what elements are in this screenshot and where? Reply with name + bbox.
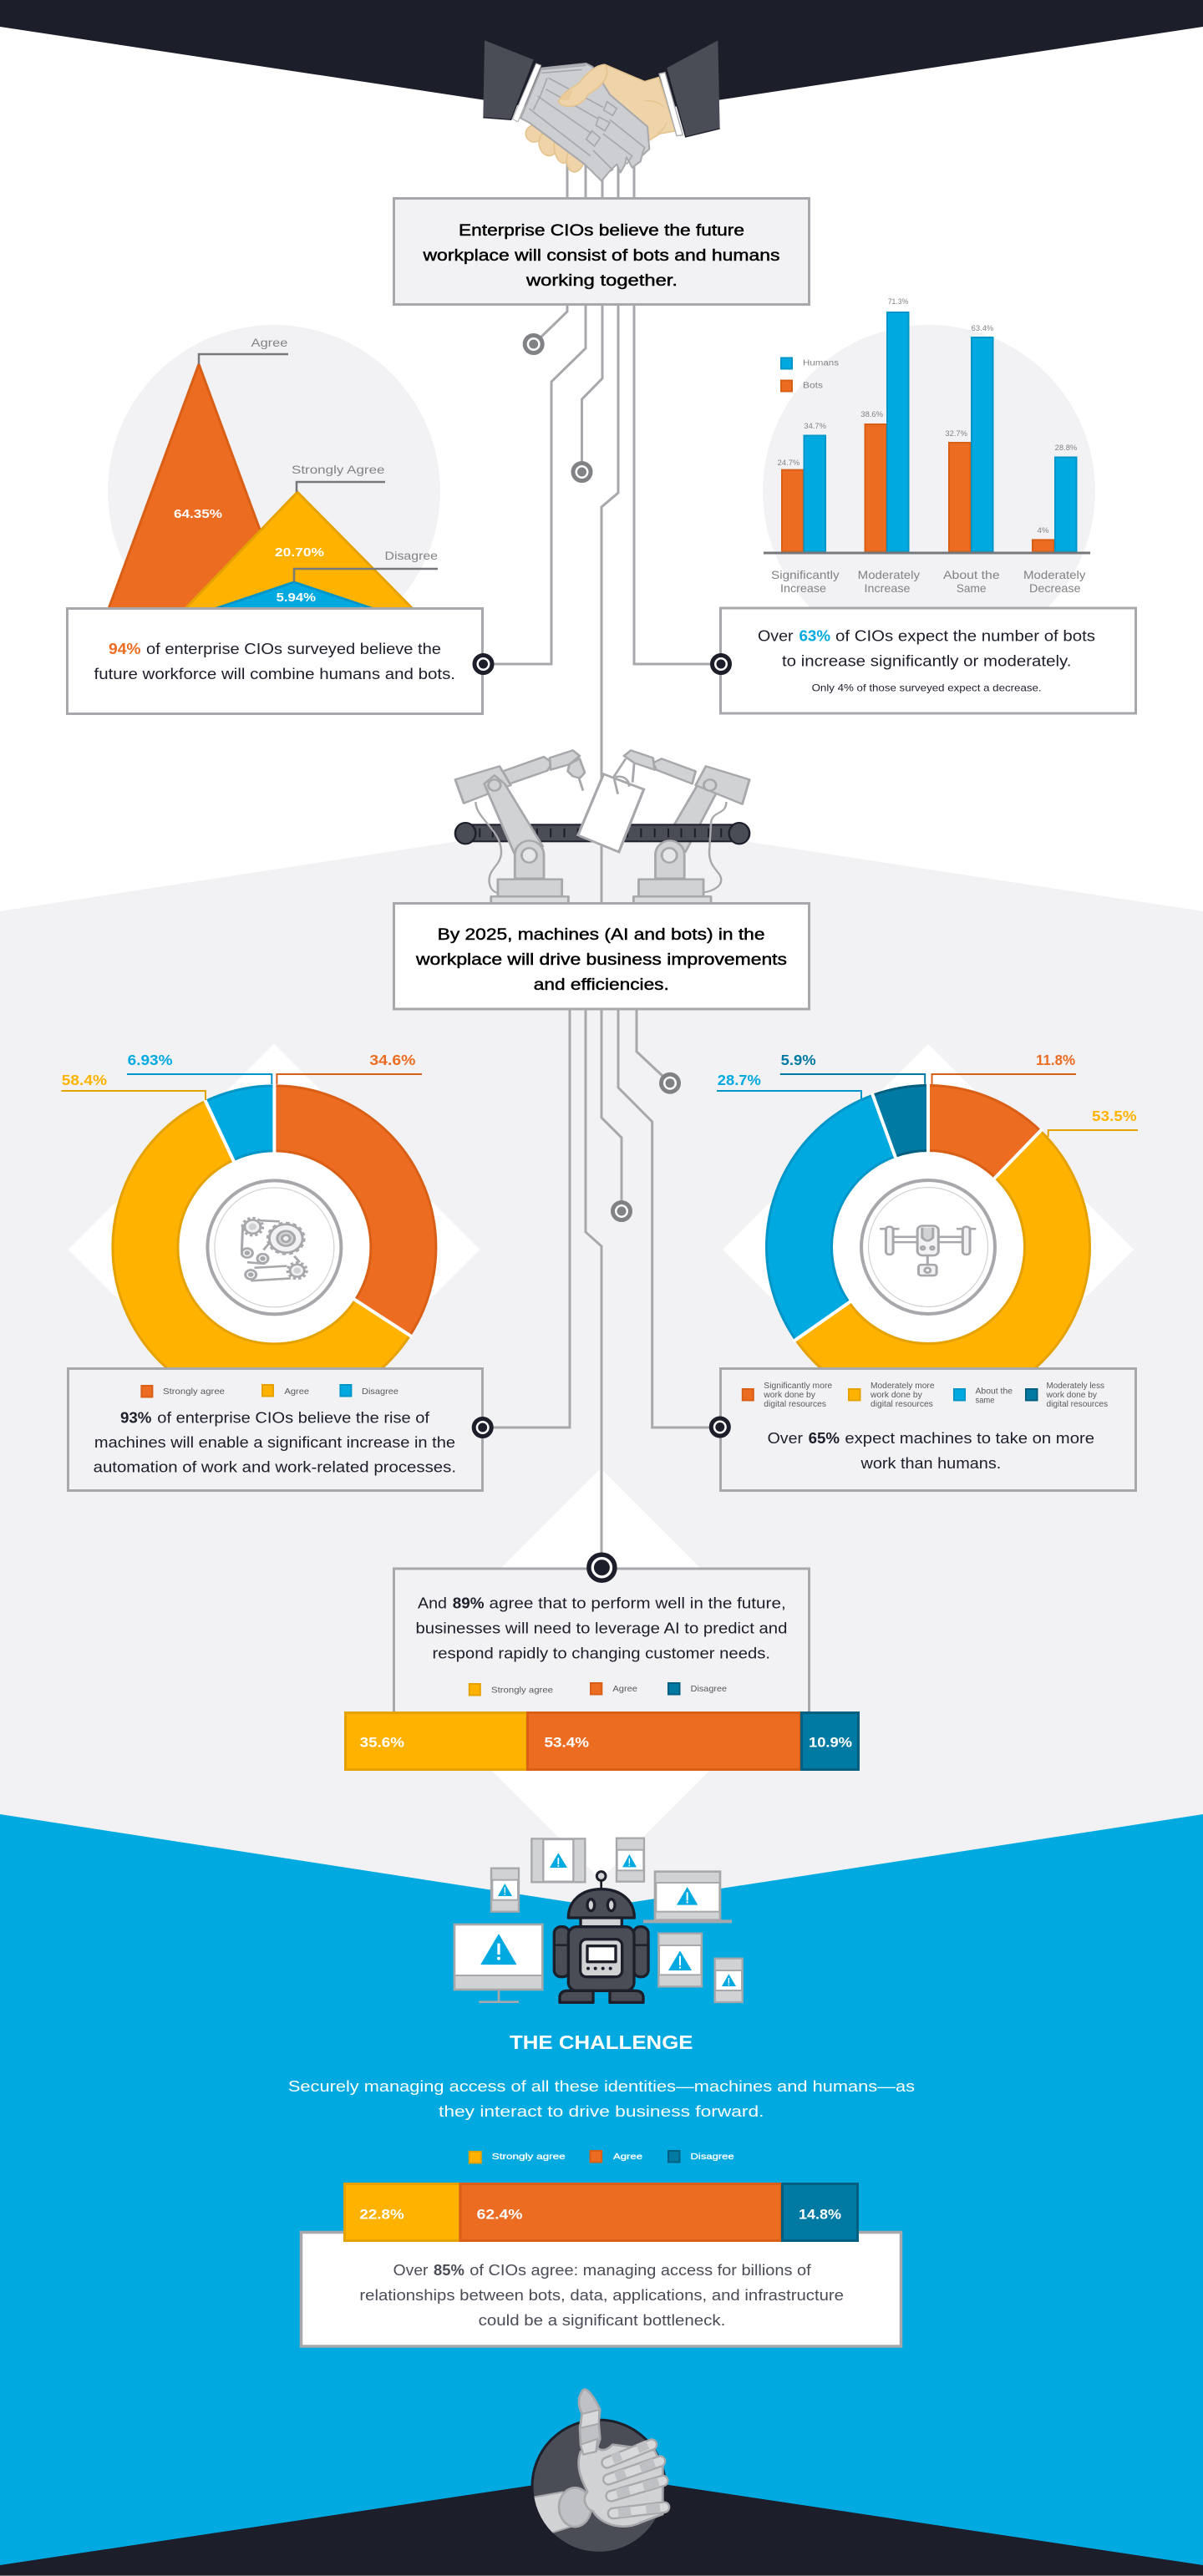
panel: 65% callout: 65% — [809, 1430, 840, 1447]
device: phone top — [617, 1838, 644, 1882]
bars: moderately increase — [865, 312, 909, 552]
chart: work share donut — [717, 1052, 1138, 1377]
legend: moderately less: digital resources — [1046, 1400, 1108, 1409]
bar values: 34.7% — [804, 422, 826, 430]
panel: 93% callout: machines will enable a significant increase in the — [94, 1434, 455, 1451]
center rings — [861, 1180, 995, 1314]
conveyor belt — [455, 823, 749, 844]
paper sheet — [578, 774, 644, 852]
category labels: Increase — [780, 581, 826, 595]
value: 64.35%: 64.35% — [174, 507, 222, 521]
segment: agree — [460, 2183, 781, 2240]
legend: about the same: same — [976, 1397, 995, 1405]
panel: 93% callout: 93% — [120, 1410, 151, 1427]
node: middle wire center — [613, 1203, 630, 1220]
segment: moderately less — [799, 1118, 1058, 1377]
legend: agree: Agree — [284, 1387, 309, 1397]
triangle: agree — [104, 364, 294, 622]
segment: strongly agree — [145, 1118, 404, 1377]
legend: agree — [591, 1683, 637, 1694]
panel: 89% callout: businesses will need to leverage AI to predict and — [416, 1620, 787, 1637]
chart: bots versus humans bars — [764, 297, 1090, 595]
value: 5.94%: 5.94% — [277, 591, 316, 605]
legend: significantly more: work done by — [763, 1391, 815, 1400]
panel: 65% callout: Over — [768, 1430, 803, 1447]
right sleeve — [667, 40, 720, 137]
legend: challenge bar — [470, 2151, 734, 2163]
legend: moderately more: digital resources — [871, 1400, 933, 1409]
segment: agree: 53.4% — [545, 1736, 589, 1751]
bars: about the same — [949, 337, 992, 552]
panel: 89% callout: agree that to perform well in the future, — [490, 1595, 786, 1612]
panel: 94% callout: 94% — [109, 641, 140, 657]
node: wire end top left — [525, 336, 542, 352]
triangle: strongly agree — [172, 492, 426, 622]
device: laptop — [643, 1872, 732, 1921]
right arm behind conveyor — [662, 775, 721, 852]
panel: headline two: By 2025, machines (AI and bots) in the — [438, 926, 765, 944]
panel: 89% callout: And — [418, 1595, 447, 1612]
legend: agree — [262, 1385, 309, 1397]
legend: disagree — [340, 1385, 398, 1397]
label: 58.4% — [61, 1072, 206, 1100]
legend: moderately less: work done by — [1045, 1391, 1097, 1400]
text: challenge description — [288, 2078, 915, 2120]
legend: disagree: Disagree — [691, 1684, 727, 1694]
thumb — [579, 2390, 600, 2454]
panel: 85% callout: relationships between bots, data, applications, and infrastructure — [359, 2287, 844, 2304]
panel: headline one — [394, 199, 809, 304]
human thumb — [558, 64, 607, 106]
node: 65% callout connector — [711, 1418, 728, 1436]
segment: disagree — [782, 2183, 857, 2240]
node: 94% callout connector — [475, 655, 492, 673]
legend: strongly agree — [141, 1386, 225, 1397]
legend: humans — [781, 357, 839, 369]
label: 5.9%: 5.9% — [781, 1052, 816, 1068]
triangle: disagree — [187, 582, 401, 618]
bar values: 38.6% — [860, 410, 883, 418]
segment: disagree: 10.9% — [809, 1736, 852, 1751]
label: 6.93% — [127, 1052, 272, 1084]
right cuff — [659, 73, 683, 136]
title: the challenge: THE CHALLENGE — [510, 2031, 693, 2053]
legend: significantly more: digital resources — [764, 1400, 826, 1409]
panel: 63% callout: 63% — [799, 628, 830, 645]
background: dark header band — [0, 0, 1203, 118]
label: 11.8% — [932, 1052, 1076, 1084]
legend: agree: Agree — [612, 1684, 637, 1694]
label: 5.9% — [780, 1052, 925, 1084]
legend: challenge bar: Agree — [613, 2152, 642, 2162]
panel: 89% callout: 89% — [453, 1595, 485, 1612]
category labels: Same — [957, 581, 987, 595]
panel: headline two: and efficiencies. — [534, 976, 669, 994]
bar values: 32.7% — [945, 429, 967, 438]
device: phone right — [715, 1959, 743, 2002]
panel: 93% callout: of enterprise CIOs believe the rise of — [157, 1410, 430, 1427]
human fingers — [525, 125, 587, 174]
segment: disagree — [802, 1712, 859, 1769]
label: 34.6%: 34.6% — [369, 1052, 416, 1068]
bar values: 28.8% — [1055, 444, 1077, 452]
legend: moderately more: Moderately more — [871, 1382, 935, 1391]
label: 6.93%: 6.93% — [128, 1052, 173, 1068]
panel: 94% callout — [67, 608, 483, 713]
icon: drone — [880, 1226, 976, 1275]
text: challenge description: Securely managing access of all these identities—machines and humans—as — [288, 2078, 915, 2095]
legend: significantly more — [743, 1382, 833, 1409]
label: strongly agree: Strongly Agree — [292, 463, 385, 476]
wrist joint — [559, 2487, 591, 2527]
panel: 63% callout: Over — [758, 628, 794, 645]
category labels: Moderately — [1023, 568, 1085, 581]
bars: significantly increase — [782, 436, 825, 552]
panel: 85% callout: Over — [393, 2262, 428, 2279]
legend: bots: Bots — [803, 382, 823, 391]
panel: 94% callout: future workforce will combine humans and bots. — [94, 666, 455, 682]
background: chart circles — [108, 325, 1095, 657]
panel: 93% callout — [69, 1368, 483, 1490]
chart: 89% stacked bar — [346, 1712, 859, 1769]
chart: automation donut — [61, 1052, 422, 1377]
panel: headline one: Enterprise CIOs believe the future — [459, 222, 744, 240]
device: tablet right — [658, 1934, 702, 1986]
panel: 85% callout: 85% — [434, 2262, 464, 2279]
forearm — [534, 2491, 571, 2533]
legend: moderately more — [849, 1382, 935, 1409]
label: 28.7% — [717, 1072, 861, 1099]
robot hand — [520, 63, 649, 181]
panel: 89% callout: respond rapidly to changing customer needs. — [433, 1645, 770, 1662]
category labels — [771, 568, 1085, 595]
device: phone left — [491, 1869, 519, 1912]
device: monitor — [454, 1924, 542, 2002]
background: dark footer band — [0, 2475, 1203, 2576]
node: 93% callout connector — [474, 1418, 491, 1437]
label: agree: Agree — [251, 336, 288, 349]
panel: 89% callout — [394, 1569, 809, 1719]
palm — [579, 2445, 662, 2527]
bar values: 4% — [1038, 526, 1049, 535]
panel: 85% callout — [301, 2232, 901, 2346]
legend: moderately more: work done by — [870, 1391, 922, 1400]
icon: robot surrounded by warning devices — [454, 1838, 743, 2002]
panel: headline one: workplace will consist of bots and humans — [422, 247, 780, 265]
label: 11.8%: 11.8% — [1036, 1052, 1075, 1068]
leader lines — [199, 354, 438, 582]
value: 20.70%: 20.70% — [275, 545, 324, 560]
robot — [554, 1872, 648, 2002]
panel: 65% callout: work than humans. — [860, 1455, 1001, 1472]
fingers — [607, 2445, 664, 2513]
right robot arm — [624, 750, 749, 904]
circuit wires: top section — [493, 159, 710, 904]
segment: disagree: 14.8% — [799, 2208, 841, 2223]
category labels: Moderately — [858, 568, 920, 581]
segment: about the same — [799, 1118, 1058, 1377]
segment: significantly more — [799, 1118, 1058, 1377]
icon: handshake of robot and human hands — [483, 40, 720, 181]
center rings — [207, 1180, 341, 1314]
legend: moderately less: Moderately less — [1046, 1382, 1104, 1391]
left robot arm — [455, 750, 585, 904]
panel: 94% callout: of enterprise CIOs surveyed believe the — [146, 641, 441, 657]
node: 89% callout connector — [589, 1554, 615, 1580]
icon: gears — [241, 1219, 306, 1280]
panel: 63% callout: of CIOs expect the number of bots — [835, 628, 1095, 645]
panel: 63% callout: Only 4% of those surveyed expect a decrease. — [812, 682, 1042, 693]
bar values — [778, 297, 1077, 535]
legend: humans: Humans — [803, 358, 839, 368]
panel: headline one: working together. — [525, 272, 678, 290]
left sleeve — [483, 40, 534, 119]
segment: strongly agree: 22.8% — [359, 2208, 404, 2223]
node: 63% callout connector — [712, 655, 730, 673]
legend: disagree — [668, 1683, 727, 1694]
legend: bots — [781, 381, 823, 391]
panel: 93% callout: automation of work and work-related processes. — [94, 1459, 456, 1476]
category labels: Decrease — [1029, 581, 1081, 595]
circle backdrop — [532, 2420, 665, 2553]
legend: strongly agree: Strongly agree — [163, 1387, 225, 1397]
segment: agree: 62.4% — [477, 2208, 523, 2223]
label: 58.4%: 58.4% — [62, 1072, 107, 1088]
background: blue challenge section — [0, 1814, 1203, 2576]
background: white diamonds — [69, 1044, 1134, 1879]
panel: 65% callout — [720, 1368, 1136, 1490]
panel: headline two — [394, 904, 809, 1009]
chart: overlapping triangles agreement — [104, 336, 438, 622]
bars: moderately decrease — [1033, 458, 1076, 552]
legend: challenge bar: Disagree — [690, 2152, 734, 2162]
panel: 85% callout: could be a significant bottleneck. — [479, 2312, 725, 2329]
segment: strongly agree — [344, 2183, 459, 2240]
segment: strongly agree — [346, 1712, 527, 1769]
device: landscape tablet — [531, 1838, 585, 1882]
bar values: 24.7% — [778, 459, 799, 467]
node: middle wire right — [662, 1074, 678, 1092]
segment: disagree — [145, 1118, 404, 1377]
label: 34.6% — [277, 1052, 422, 1084]
bar values: 63.4% — [972, 324, 993, 332]
legend: moderately less — [1026, 1382, 1108, 1409]
right gripper — [614, 758, 634, 794]
panel: 85% callout: of CIOs agree: managing access for billions of — [470, 2262, 812, 2279]
label: 53.5%: 53.5% — [1092, 1108, 1137, 1124]
human palm — [585, 64, 675, 140]
category labels: Significantly — [771, 568, 840, 581]
segment: strongly agree: 35.6% — [360, 1736, 404, 1751]
axis — [764, 551, 1090, 555]
legend: about the same: About the — [976, 1387, 1013, 1396]
category labels: About the — [943, 568, 1000, 581]
node: wire end upper middle — [573, 463, 591, 481]
panel: headline two: workplace will drive business improvements — [415, 951, 787, 969]
circuit wires: middle section — [493, 1009, 710, 1562]
legend: disagree: Disagree — [362, 1387, 398, 1397]
segment: agree — [528, 1712, 800, 1769]
chart: 85% stacked bar — [344, 2183, 857, 2240]
label: 28.7%: 28.7% — [718, 1072, 761, 1088]
panel: 65% callout: expect machines to take on more — [845, 1430, 1094, 1447]
legend: strongly agree: Strongly agree — [491, 1686, 553, 1696]
icon: robot arms on conveyor — [455, 750, 749, 904]
category labels: Increase — [864, 581, 911, 595]
text: challenge description: they interact to drive business forward. — [439, 2103, 764, 2120]
icon: robot thumbs up — [529, 2390, 665, 2553]
legend: significantly more: Significantly more — [764, 1382, 833, 1391]
segment: agree — [145, 1118, 404, 1377]
segment: moderately more — [799, 1118, 1058, 1377]
label: 53.5% — [1048, 1108, 1138, 1137]
panel: 63% callout — [720, 608, 1136, 713]
left cuff — [512, 63, 541, 122]
background: light grey section — [0, 819, 1203, 1938]
legend: about the same — [954, 1387, 1013, 1405]
panel: 63% callout: to increase significantly or moderately. — [782, 653, 1071, 670]
label: disagree: Disagree — [384, 549, 438, 562]
bar values: 71.3% — [888, 297, 908, 306]
legend: strongly agree — [470, 1684, 553, 1696]
legend: challenge bar: Strongly agree — [492, 2152, 566, 2162]
